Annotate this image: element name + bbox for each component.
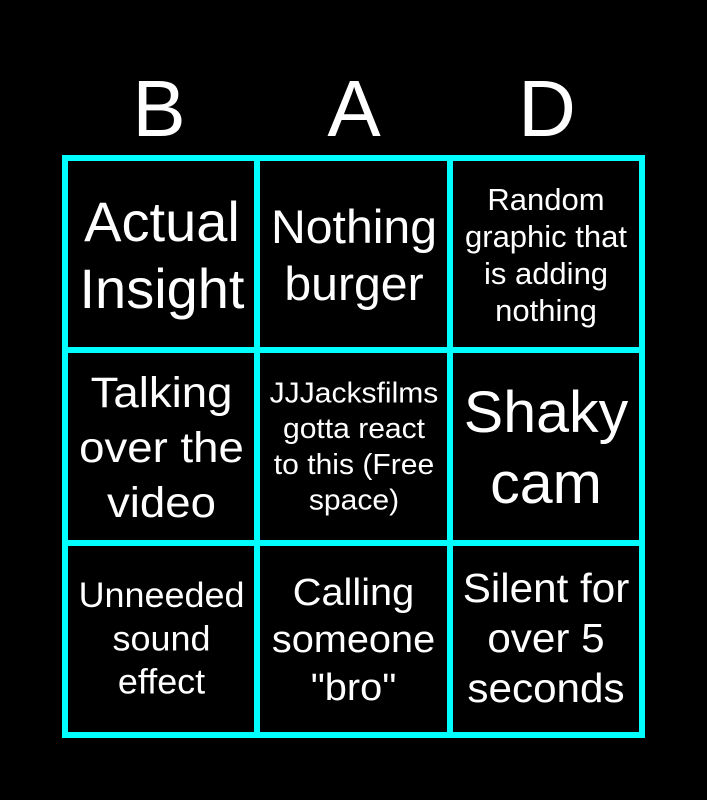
bingo grid lines (62, 155, 645, 738)
cell: Unneeded sound effect: Unneeded (79, 575, 244, 615)
cell: Talking over the video: over the (79, 424, 244, 472)
cell: Shaky cam (464, 381, 629, 516)
cell: Actual Insight (80, 190, 245, 320)
cell: JJJacksfilms free space: to this (Free (274, 448, 434, 481)
cell: Nothing burger: burger (284, 259, 424, 311)
title: BAD (132, 64, 576, 153)
cell: Calling someone bro: someone (272, 619, 435, 661)
cell: Unneeded sound effect (79, 575, 244, 701)
cell: Calling someone bro (272, 572, 435, 709)
cell: Shaky cam: Shaky (464, 381, 629, 445)
cell: Random graphic: is adding (484, 256, 608, 291)
cell: Talking over the video: video (107, 479, 216, 527)
cell: Silent for over 5 seconds: over 5 (487, 615, 605, 661)
cell: Unneeded sound effect: effect (118, 662, 205, 701)
cell: Unneeded sound effect: sound (113, 619, 210, 658)
cell: Silent for over 5 seconds: seconds (467, 665, 625, 711)
cell: Silent for over 5 seconds (463, 565, 629, 711)
cell: Calling someone bro: Calling (293, 572, 414, 614)
cell: Talking over the video: Talking (91, 369, 232, 417)
cell: Talking over the video (79, 369, 244, 527)
cell: Calling someone bro: "bro" (311, 667, 396, 709)
cell: Nothing burger: Nothing (271, 202, 437, 254)
cell: JJJacksfilms free space: gotta react (283, 412, 425, 445)
cell: Random graphic: Random (487, 182, 605, 217)
cell: Shaky cam: cam (490, 452, 602, 516)
title: BAD: A (327, 64, 381, 153)
cell: Silent for over 5 seconds: Silent for (463, 565, 629, 611)
cell: JJJacksfilms free space: space) (309, 484, 399, 516)
cell: Random graphic (465, 182, 627, 328)
title: BAD: D (518, 64, 576, 153)
cell: JJJacksfilms free space (270, 377, 438, 516)
cell: JJJacksfilms free space: JJJacksfilms (270, 377, 438, 409)
cell: Actual Insight: Insight (80, 257, 245, 320)
title: BAD: B (132, 64, 186, 153)
cell: Random graphic: nothing (495, 293, 597, 328)
cell: Nothing burger (271, 202, 437, 311)
cell: Random graphic: graphic that (465, 219, 627, 254)
cell: Actual Insight: Actual (84, 190, 240, 253)
